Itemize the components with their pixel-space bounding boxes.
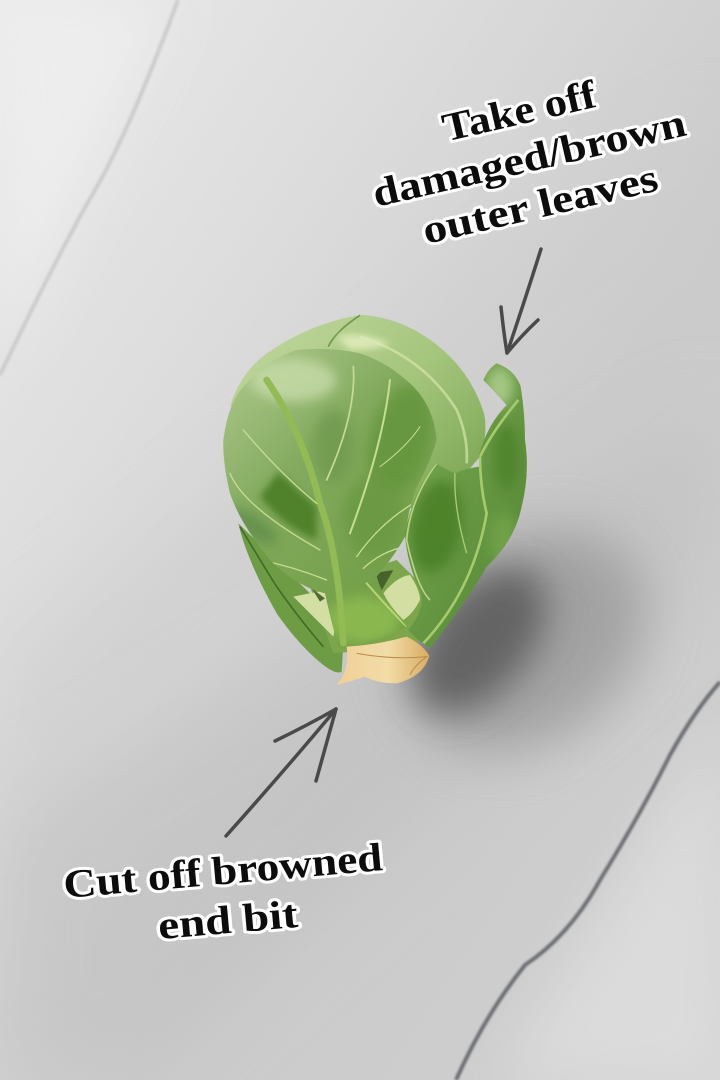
lower back leaf <box>238 523 343 672</box>
label: cut off browned end bit: Cut off browned <box>61 834 384 907</box>
browned end <box>337 637 429 685</box>
label: take off damaged leaves: outer leaves <box>418 155 662 253</box>
pale inner head <box>293 587 343 637</box>
Brussels sprout <box>210 315 537 685</box>
annotation: end bit <box>61 709 384 948</box>
sprout shadow <box>361 484 689 796</box>
main front leaf <box>223 349 436 646</box>
leaf shading <box>260 472 317 540</box>
label: take off damaged leaves <box>368 71 690 253</box>
top of head <box>230 315 485 533</box>
arrow: to outer leaf <box>501 249 541 353</box>
label: cut off browned end bit: end bit <box>156 891 300 948</box>
peeling right leaf <box>405 364 527 648</box>
arrow: to browned end <box>226 709 336 836</box>
base filling the head underside <box>310 560 430 653</box>
label: take off damaged leaves: damaged/brown <box>368 100 690 216</box>
label: take off damaged leaves: Take off <box>438 71 601 150</box>
label: cut off browned end bit <box>61 834 384 948</box>
annotation: outer leaves <box>368 71 690 353</box>
leaf veins <box>230 367 420 643</box>
